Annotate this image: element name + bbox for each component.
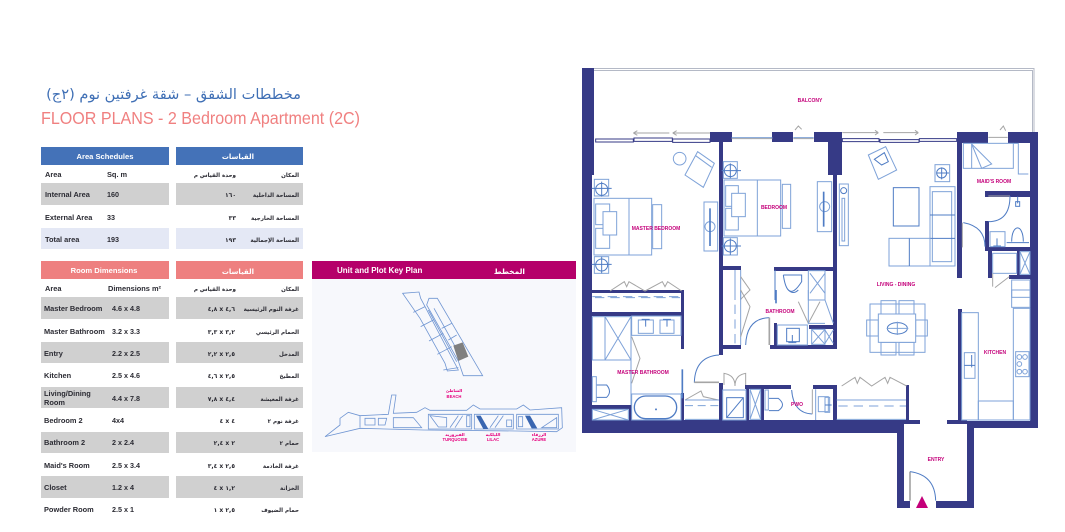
panel: room dimensions Arabic table: المكان (281, 286, 299, 293)
label: powder room: PWO (791, 402, 803, 408)
panel: area schedules Arabic table: المساحة الخارجية (251, 216, 299, 222)
key plan: turquoise label: TURQUOISE (443, 437, 468, 442)
label: kitchen: KITCHEN (984, 350, 1006, 356)
label: maid's room: MAID'S ROOM (977, 179, 1011, 185)
panel: room dimensions table: Living/Dining (44, 389, 91, 398)
key plan: lilac label (486, 432, 501, 442)
balcony railing (594, 68, 1034, 132)
panel: room dimensions Arabic table: غرفة الخادمة (263, 464, 299, 470)
panel: room dimensions table: 4x4 (112, 416, 124, 425)
panel: room dimensions Arabic table: المدخل (279, 352, 299, 358)
panel: room dimensions table: Room Dimensions (71, 266, 137, 275)
panel: room dimensions Arabic table: غرفة النوم الرئيسية (244, 307, 299, 313)
panel: room dimensions table: Maid's Room (44, 461, 90, 470)
key plan: plot outline (325, 395, 562, 437)
panel: room dimensions table: Entry (44, 349, 64, 358)
panel: room dimensions table: 2.5 x 1 (112, 505, 134, 514)
panel: room dimensions table: Powder Room (44, 505, 94, 514)
panel: unit and plot key plan (312, 261, 576, 452)
panel: room dimensions table: Bedroom 2 (44, 416, 83, 425)
key plan: azure label (532, 432, 547, 442)
panel: room dimensions table: Master Bedroom (44, 304, 103, 313)
icon: entry triangle marker (916, 496, 928, 508)
panel: area schedules Arabic table (176, 147, 303, 249)
panel: room dimensions Arabic table: غرفة المعيشة (260, 397, 299, 403)
panel: area schedules Arabic table: القياسات (222, 153, 254, 161)
panel: room dimensions Arabic table: غرفة نوم ٢ (268, 419, 299, 425)
key plan: lilac label: LILAC (487, 437, 499, 442)
panel: area schedules table: Total area (45, 235, 80, 244)
panel: room dimensions Arabic table: حمام ٢ (280, 441, 299, 447)
panel: area schedules Arabic table: المساحة الإجمالية (250, 238, 299, 244)
key plan: azure label: الزرقاء (532, 432, 547, 437)
label: master bathroom: MASTER BATHROOM (617, 370, 669, 376)
panel: room dimensions table: 1.2 x 4 (112, 483, 134, 492)
key plan: beach label: الشاطئ (446, 388, 463, 393)
panel: room dimensions Arabic table: القياسات (222, 268, 254, 276)
panel: room dimensions Arabic table: ٤,٨ x ٤,٦ (208, 306, 235, 313)
panel: room dimensions table: Master Bathroom (44, 327, 105, 336)
panel: area schedules table: 33 (107, 213, 115, 222)
furniture: living room and maid's room (839, 126, 1030, 297)
panel: area schedules table: Sq. m (107, 170, 128, 179)
panel: room dimensions Arabic table: ٢,٤ x ٢ (214, 440, 235, 447)
panel: room dimensions Arabic table: ٤ x ٤ (220, 418, 235, 425)
panel: area schedules Arabic table: ٣٣ (229, 215, 236, 222)
label: bedroom: BEDROOM (761, 205, 787, 211)
panel: room dimensions Arabic table: الخزانة (280, 486, 299, 492)
panel: room dimensions Arabic table: ٤ x ١,٢ (214, 485, 235, 492)
floor plan (582, 68, 1038, 508)
panel: area schedules Arabic table: ١٦٠ (225, 192, 236, 199)
panel: area schedules table: External Area (45, 213, 93, 222)
panel: room dimensions Arabic table: المطبخ (279, 374, 299, 380)
panel: area schedules table: Area Schedules (77, 152, 133, 161)
panel: area schedules table (41, 147, 169, 249)
title: English: FLOOR PLANS - 2 Bedroom Apartment (2C) (41, 108, 360, 128)
panel: room dimensions Arabic table: ٣,٣ x ٣,٢ (208, 329, 235, 336)
panel: room dimensions table: 2.2 x 2.5 (112, 349, 140, 358)
panel: room dimensions Arabic table: ٤,٦ x ٢,٥ (208, 373, 235, 380)
panel: room dimensions table: Bathroom 2 (44, 438, 85, 447)
panel: room dimensions table: Area (45, 284, 62, 293)
panel: room dimensions table (41, 261, 169, 514)
panel: room dimensions Arabic table (176, 261, 303, 514)
key plan: beach label: BEACH (447, 394, 461, 399)
furniture: master bedroom and bedroom (592, 126, 832, 300)
panel: area schedules Arabic table: المكان (281, 172, 299, 179)
panel: area schedules Arabic table: المساحة الداخلية (253, 193, 299, 199)
panel: area schedules table: 193 (107, 235, 119, 244)
key plan: azure label: AZURE (532, 437, 546, 442)
key plan: beach label (446, 388, 463, 399)
panel: unit and plot key plan: المخطط (494, 267, 525, 276)
panel: room dimensions table: 2.5 x 4.6 (112, 371, 140, 380)
key plan: turquoise label (443, 432, 468, 442)
panel: room dimensions Arabic table: ٢,٢ x ٢,٥ (208, 351, 235, 358)
key plan: lilac label: الليلكية (486, 432, 501, 437)
panel: room dimensions table: 4.6 x 4.8 (112, 304, 140, 313)
key plan: tower outline (403, 292, 483, 376)
panel: room dimensions table: Dimensions m² (108, 284, 162, 293)
panel: area schedules table: Internal Area (45, 190, 91, 199)
label: entry: ENTRY (928, 457, 945, 463)
panel: unit and plot key plan: Unit and Plot Key Plan (337, 266, 422, 275)
furniture: dining and kitchen (825, 290, 1030, 501)
panel: room dimensions table: Closet (44, 483, 67, 492)
panel: room dimensions table: 4.4 x 7.8 (112, 394, 140, 403)
label: master bedroom: MASTER BEDROOM (632, 226, 680, 232)
panel: area schedules Arabic table: ١٩٣ (225, 237, 236, 244)
panel: area schedules Arabic table: وحدة القياس م (194, 173, 237, 179)
panel: room dimensions Arabic table: ١ x ٢,٥ (214, 507, 235, 514)
panel: room dimensions table: 3.2 x 3.3 (112, 327, 140, 336)
panel: room dimensions Arabic table: الحمام الرئيسي (256, 330, 299, 336)
panel: room dimensions Arabic table: حمام الضيوف (261, 508, 299, 514)
label: bathroom: BATHROOM (765, 309, 795, 315)
panel: room dimensions Arabic table: ٣,٤ x ٢,٥ (208, 463, 235, 470)
label: balcony: BALCONY (798, 98, 823, 104)
panel: room dimensions Arabic table: ٧,٨ x ٤,٤ (208, 396, 235, 403)
furniture: bathrooms and closets (592, 290, 828, 420)
panel: room dimensions table: Room (44, 398, 65, 407)
key plan: turquoise label: الفيروزية (445, 432, 465, 437)
walls (582, 68, 1038, 508)
panel: room dimensions table: 2 x 2.4 (112, 438, 134, 447)
label: living dining: LIVING - DINING (877, 282, 915, 288)
panel: room dimensions table: 2.5 x 3.4 (112, 461, 140, 470)
panel: area schedules table: 160 (107, 190, 119, 199)
title: Arabic: مخططات الشقق – شقة غرفتين نوم (٢ج) (46, 86, 301, 104)
panel: room dimensions Arabic table: وحدة القياس م (194, 287, 237, 293)
panel: area schedules table: Area (45, 170, 62, 179)
panel: room dimensions table: Kitchen (44, 371, 72, 380)
